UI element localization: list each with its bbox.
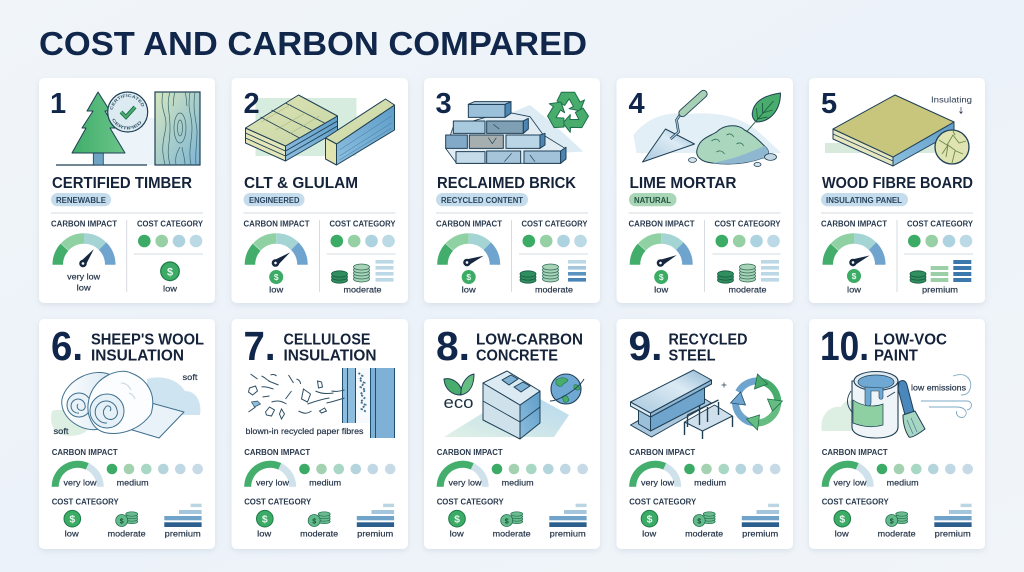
- cost category: $: [697, 518, 701, 526]
- carbon impact: [822, 447, 973, 488]
- tag: NATURAL: [634, 196, 671, 205]
- icon: certified tree and wood plank: CERTIFIED: [112, 118, 141, 130]
- heading: CLT & GLULAM: [244, 175, 358, 192]
- cost category: COST CATEGORY: [907, 218, 973, 228]
- cost category: COST CATEGORY: [52, 496, 119, 506]
- heading: SHEEP'S WOOL: [91, 331, 204, 348]
- number 3: 3: [436, 88, 452, 120]
- cost category: [629, 496, 779, 539]
- cost category: $: [505, 518, 509, 526]
- cost category: moderate: [878, 529, 916, 539]
- carbon impact: CARBON IMPACT: [244, 447, 311, 457]
- cost category: premium: [935, 529, 971, 539]
- cost category: [714, 218, 781, 295]
- carbon impact: very low: [64, 478, 97, 488]
- carbon impact: medium: [502, 478, 534, 488]
- carbon impact: medium: [309, 478, 341, 488]
- icon: certified tree and wood plank: CERTIFICATED: [110, 94, 144, 110]
- heading: STEEL: [668, 347, 716, 364]
- carbon impact: very low: [67, 272, 101, 282]
- carbon impact: [436, 218, 503, 295]
- carbon impact: [244, 447, 396, 488]
- cost category: low: [65, 529, 80, 539]
- cost category: [437, 496, 587, 539]
- carbon impact: [244, 218, 310, 295]
- carbon impact: low: [654, 285, 669, 295]
- carbon impact: $: [659, 272, 664, 282]
- carbon impact: low: [462, 285, 477, 295]
- carbon impact: CARBON IMPACT: [628, 218, 695, 228]
- cost category: low: [163, 283, 178, 293]
- cost category: [822, 496, 972, 539]
- heading: WOOD FIBRE BOARD: [822, 175, 973, 192]
- cost category: $: [69, 514, 75, 526]
- heading: PAINT: [874, 347, 919, 364]
- carbon impact: CARBON IMPACT: [436, 218, 503, 228]
- heading: LOW-CARBON: [476, 331, 583, 348]
- carbon impact: low: [77, 282, 92, 292]
- icon: concrete block: [444, 371, 569, 439]
- carbon impact: CARBON IMPACT: [52, 447, 118, 457]
- cost category: $: [647, 514, 653, 526]
- heading: [91, 331, 204, 364]
- cost category: low: [257, 529, 272, 539]
- carbon impact: CARBON IMPACT: [822, 447, 888, 457]
- panel: 10 low-voc paint: [809, 319, 985, 549]
- cost category: premium: [550, 529, 586, 539]
- icon: blown-in fibres and wall: blown-in recycled paper fibres: [246, 426, 364, 436]
- carbon impact: low: [847, 285, 862, 295]
- carbon impact: CARBON IMPACT: [244, 218, 310, 228]
- heading: [284, 331, 376, 364]
- heading: CERTIFIED TIMBER: [52, 175, 192, 192]
- cost category: COST CATEGORY: [714, 218, 781, 228]
- cost category: $: [120, 518, 124, 526]
- cost category: low: [642, 529, 657, 539]
- carbon impact: medium: [694, 478, 726, 488]
- cost category: moderate: [535, 285, 573, 295]
- icon: wool rolls: soft: [54, 426, 69, 436]
- panel: 6 sheep's wool insulation: [39, 319, 215, 549]
- carbon impact: low: [269, 285, 284, 295]
- carbon impact: $: [466, 272, 471, 282]
- carbon impact: $: [852, 271, 857, 281]
- heading: CELLULOSE: [284, 331, 370, 348]
- carbon impact: [437, 447, 588, 488]
- heading: LIME MORTAR: [630, 175, 736, 192]
- heading: [476, 331, 583, 364]
- carbon impact: CARBON IMPACT: [629, 447, 696, 457]
- heading: RECLAIMED BRICK: [437, 175, 577, 192]
- icon: clt panel and glulam beam: [246, 95, 394, 165]
- number 1: 1: [50, 88, 66, 120]
- cost category: moderate: [344, 285, 382, 295]
- icon: wood fibre board: Insulating: [931, 94, 972, 104]
- cost category: COST CATEGORY: [629, 496, 696, 506]
- carbon impact: [629, 447, 780, 488]
- panel: 1 certified timber: [38, 78, 216, 306]
- icon: eco leaves: [444, 374, 474, 412]
- cost category: low: [835, 529, 850, 539]
- carbon impact: CARBON IMPACT: [51, 218, 118, 228]
- tag: [821, 193, 908, 206]
- heading: INSULATION: [284, 347, 376, 364]
- carbon impact: $: [274, 272, 279, 282]
- icon: wool rolls: [51, 371, 200, 438]
- carbon impact: medium: [117, 478, 149, 488]
- cost category: premium: [357, 529, 393, 539]
- cost category: COST CATEGORY: [244, 496, 311, 506]
- cost category: moderate: [728, 285, 767, 295]
- number 8: 8.: [436, 323, 470, 369]
- cost category: COST CATEGORY: [437, 496, 504, 506]
- cost category: premium: [165, 529, 201, 539]
- cost category: moderate: [108, 529, 146, 539]
- tag: ENGINEERED: [249, 196, 300, 205]
- carbon impact: CARBON IMPACT: [437, 447, 503, 457]
- icon: wool rolls: soft: [182, 372, 198, 382]
- heading: RECYCLED: [668, 331, 748, 348]
- tag: [51, 193, 111, 206]
- carbon impact: [628, 218, 695, 295]
- panel: 9 recycled steel: [616, 319, 793, 549]
- cost category: COST CATEGORY: [137, 218, 203, 228]
- cost category: [907, 218, 973, 295]
- carbon impact: very low: [641, 478, 675, 488]
- cost category: $: [839, 514, 845, 526]
- cost category: [330, 218, 396, 295]
- tag: RENEWABLE: [56, 196, 107, 205]
- carbon impact: very low: [834, 478, 867, 488]
- number 7: 7.: [244, 323, 276, 369]
- panel: 5 wood fibre board: [809, 78, 985, 303]
- tag: [629, 193, 676, 206]
- icon: brick wall: [446, 102, 583, 163]
- icon: eco leaves: eco: [444, 393, 474, 412]
- cost category: $: [454, 514, 460, 526]
- carbon impact: [51, 218, 118, 292]
- cost category: [244, 496, 394, 539]
- cost category: low: [450, 529, 465, 539]
- cost category: $: [312, 518, 316, 526]
- heading: LOW-VOC: [874, 331, 947, 348]
- panel: 4 lime mortar: [616, 78, 793, 303]
- cost category: $: [890, 518, 894, 526]
- cost category: $: [167, 266, 173, 278]
- cost category: moderate: [685, 529, 723, 539]
- cost category: premium: [922, 285, 958, 295]
- carbon impact: CARBON IMPACT: [821, 218, 888, 228]
- cost category: COST CATEGORY: [522, 218, 588, 228]
- cost category: [520, 218, 588, 295]
- panel: 2 clt and glulam: [232, 78, 408, 303]
- icon: steel i-beam: [630, 370, 732, 439]
- icon: paint can, brush and emissions: low emissions: [911, 382, 966, 392]
- number 9: 9.: [628, 323, 662, 369]
- number 6: 6.: [51, 323, 83, 369]
- icon: recycling arrows ring: [730, 374, 782, 430]
- number 5: 5: [821, 88, 837, 120]
- title: COST AND CARBON COMPARED: [39, 25, 587, 62]
- cost category: $: [262, 514, 268, 526]
- heading: INSULATION: [91, 347, 184, 364]
- carbon impact: very low: [448, 478, 482, 488]
- icon: certified tree and wood plank: [56, 91, 201, 166]
- icon: trowel, mortar pile and leaf: [634, 93, 782, 166]
- number 10: 10.: [820, 323, 869, 369]
- number 2: 2: [244, 88, 260, 120]
- panel: 3 reclaimed brick: [424, 78, 600, 303]
- heading: [668, 331, 748, 364]
- icon: recycling symbol: [543, 92, 591, 136]
- cost category: [52, 496, 202, 539]
- tag: INSULATING PANEL: [826, 196, 902, 205]
- cost category: moderate: [300, 529, 338, 539]
- cost category: [137, 218, 203, 293]
- carbon impact: [821, 218, 888, 295]
- number 4: 4: [628, 88, 645, 120]
- cost category: premium: [742, 529, 778, 539]
- cost category: COST CATEGORY: [822, 496, 889, 506]
- tag: [244, 193, 304, 206]
- panel: 8 low-carbon concrete: [424, 319, 600, 549]
- tag: [436, 193, 528, 206]
- icon: globe: [550, 374, 584, 404]
- heading: CONCRETE: [476, 347, 558, 364]
- cost category: moderate: [493, 529, 531, 539]
- cost category: COST CATEGORY: [330, 218, 396, 228]
- panel: 7 cellulose insulation: [232, 319, 408, 549]
- carbon impact: medium: [887, 478, 919, 488]
- icon: wood fibre board: [825, 94, 972, 166]
- carbon impact: very low: [256, 478, 290, 488]
- tag: RECYCLED CONTENT: [441, 196, 523, 205]
- heading: [874, 331, 947, 364]
- icon: paint can, brush and emissions: [821, 372, 972, 438]
- icon: blown-in fibres and wall: [246, 368, 394, 438]
- carbon impact: [52, 447, 203, 488]
